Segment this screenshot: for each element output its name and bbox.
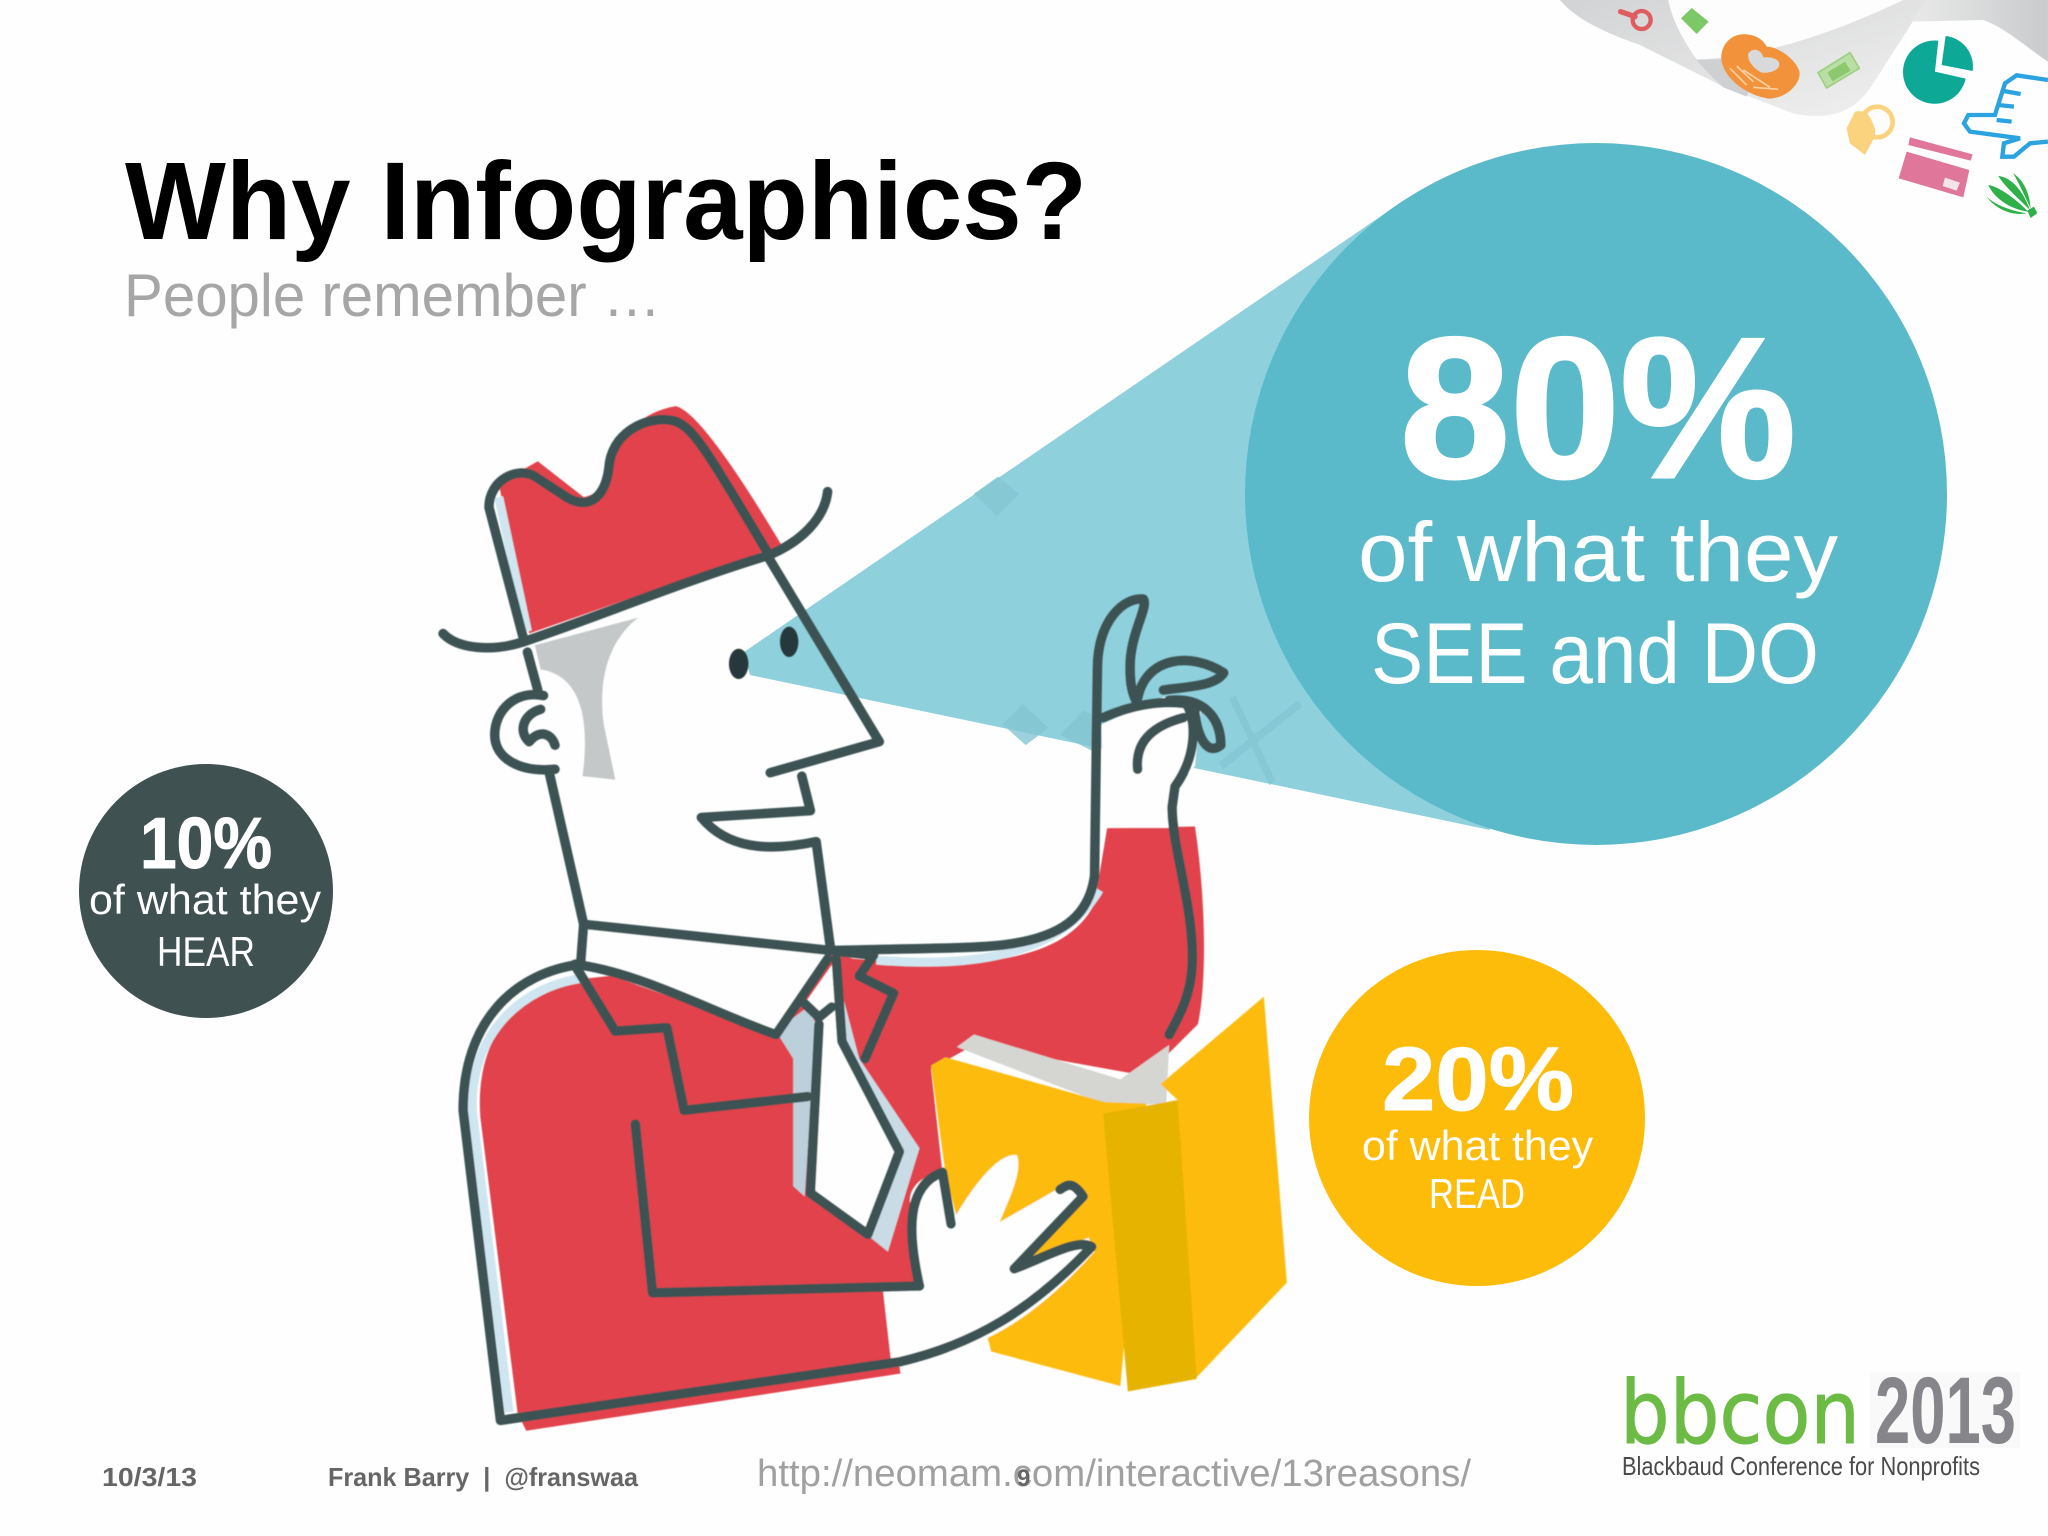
grey hair bbox=[535, 618, 638, 780]
footer: source URL: http://neomam.com/interactive/13reasons/ bbox=[757, 1453, 1471, 1495]
icon: red ring bbox=[1621, 11, 1651, 29]
vision cone bbox=[744, 203, 1490, 830]
title: Why Infographics? bbox=[125, 140, 1087, 263]
subtitle: People remember … bbox=[124, 262, 661, 329]
yellow book bbox=[931, 997, 1287, 1391]
white hand on book bbox=[882, 1155, 1095, 1358]
callout: 80% see and do: SEE and DO bbox=[1371, 606, 1819, 702]
lower hand thumb bbox=[912, 1172, 951, 1286]
callout: 20% read: 20% bbox=[1382, 1030, 1574, 1130]
callout: 10% hear bbox=[79, 764, 333, 1018]
illustration: man reading a book bbox=[443, 406, 1287, 1431]
sleeve line bbox=[635, 1124, 919, 1293]
face profile bbox=[701, 556, 879, 948]
callout: 80% see and do: of what they bbox=[1358, 505, 1838, 599]
collar and raised arm bbox=[584, 599, 1144, 950]
body outline bbox=[463, 964, 1092, 1420]
footer: author: Frank Barry | @franswaa bbox=[328, 1462, 639, 1492]
decorative corner: paper swoosh with icons bbox=[1560, 0, 2048, 218]
eyes bbox=[729, 627, 798, 679]
icon: blue pointing hand bbox=[1964, 75, 2048, 157]
icon: yellow head bbox=[1847, 107, 1893, 155]
white raised hand bbox=[1101, 697, 1201, 828]
logo: bbcon 2013: Blackbaud Conference for Nonprofits bbox=[1622, 1451, 1980, 1481]
shirt shading right of tie bbox=[842, 993, 919, 1252]
cone background marks bbox=[974, 476, 1300, 783]
callout: 20% read: READ bbox=[1429, 1170, 1525, 1217]
highlight strokes bbox=[472, 497, 1099, 1412]
white tie bbox=[805, 959, 899, 1234]
tie outline bbox=[805, 959, 899, 1234]
left lapel bbox=[575, 966, 808, 1110]
paper swoosh bbox=[1560, 0, 2048, 116]
icon: orange heart hands bbox=[1721, 34, 1800, 99]
footer: page number: 9 bbox=[1017, 1465, 1030, 1492]
callout: 10% hear: HEAR bbox=[157, 928, 255, 975]
white shirt front bbox=[584, 928, 830, 1035]
collar edge bbox=[575, 959, 828, 1035]
outlines bbox=[443, 420, 1224, 1420]
callout: 10% hear: of what they bbox=[89, 876, 321, 923]
icon: green ticket bbox=[1818, 53, 1859, 88]
neck back bbox=[527, 652, 584, 962]
hat brim bbox=[443, 492, 828, 648]
icon: teal pie chart bbox=[1903, 36, 1973, 104]
hat outline bbox=[489, 420, 767, 638]
callout: 80% see and do bbox=[1245, 143, 1947, 845]
callout: 20% read: of what they bbox=[1362, 1122, 1593, 1169]
icon: green hot air balloon bbox=[1986, 173, 2037, 218]
logo: bbcon 2013 bbox=[1620, 1358, 2020, 1481]
logo: bbcon 2013: bbcon bbox=[1620, 1362, 1860, 1464]
raised hand fingers bbox=[1103, 661, 1224, 1035]
red jacket bbox=[480, 826, 1204, 1431]
ear bbox=[495, 695, 555, 770]
footer: date: 10/3/13 bbox=[102, 1462, 197, 1492]
right lapel bbox=[842, 952, 894, 1059]
callout: 10% hear: 10% bbox=[140, 804, 272, 884]
callout: 20% read bbox=[1309, 950, 1645, 1286]
red hat bbox=[499, 406, 782, 634]
icon: pink credit card bbox=[1899, 137, 1973, 197]
icon: green book bbox=[1681, 8, 1709, 34]
shirt shading left of tie bbox=[776, 1007, 816, 1196]
callout: 80% see and do: 80% bbox=[1400, 297, 1796, 520]
